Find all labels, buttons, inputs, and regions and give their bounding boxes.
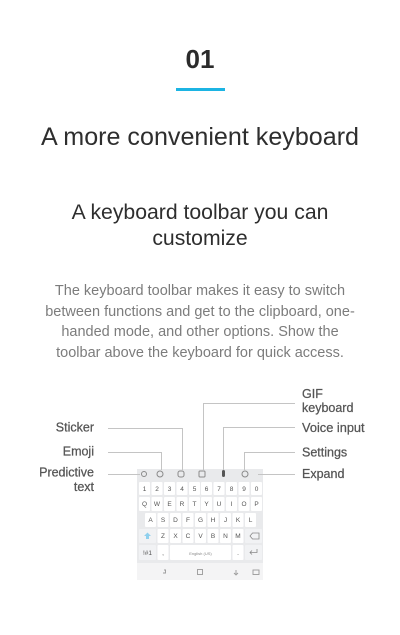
- key labels: H: [211, 517, 216, 524]
- key labels: 7: [217, 486, 221, 493]
- key labels: 8: [230, 486, 234, 493]
- left callout labels: [39, 420, 95, 494]
- key labels: Q: [142, 501, 147, 508]
- enter icon: [250, 549, 257, 554]
- key labels: A: [148, 517, 153, 524]
- left callout labels: Sticker: [56, 420, 94, 434]
- description text: between functions and get to the clipboard, one-: [45, 304, 355, 320]
- key labels: Z: [161, 533, 165, 540]
- backspace icon: [250, 533, 259, 539]
- left callout labels: text: [74, 480, 95, 494]
- key labels: G: [198, 517, 203, 524]
- keyboard: [137, 469, 263, 580]
- subheading: A keyboard toolbar you can: [72, 201, 328, 224]
- callout lines: [108, 404, 295, 474]
- right callout labels: Settings: [302, 446, 347, 460]
- key labels: 5: [193, 486, 197, 493]
- key labels: 3: [168, 486, 172, 493]
- right callout labels: Voice input: [302, 420, 365, 435]
- key labels: 4: [180, 486, 184, 493]
- right callout labels: keyboard: [302, 401, 353, 415]
- key labels: K: [236, 517, 241, 524]
- subheading: customize: [152, 226, 248, 250]
- description text: [45, 283, 355, 360]
- key labels: D: [173, 517, 178, 524]
- key labels: !#1: [143, 550, 152, 557]
- toolbar icons: [142, 471, 248, 477]
- key labels: 1: [143, 486, 147, 493]
- key labels: F: [186, 517, 190, 524]
- key labels: O: [241, 501, 247, 508]
- key labels: Y: [204, 501, 209, 508]
- key labels: T: [193, 501, 197, 508]
- key labels: 0: [255, 486, 259, 493]
- key labels: S: [161, 517, 166, 524]
- key labels: .: [237, 550, 239, 557]
- shift icon: [144, 532, 151, 539]
- subheading: [72, 201, 328, 250]
- key labels: I: [231, 501, 233, 508]
- right callout labels: GIF: [302, 387, 323, 401]
- left callout labels: Predictive: [39, 466, 94, 480]
- key labels: L: [249, 517, 253, 524]
- key labels: 2: [155, 486, 159, 493]
- key labels: E: [167, 501, 172, 508]
- main heading: A more convenient keyboard: [41, 123, 359, 151]
- key labels: P: [254, 501, 259, 508]
- key labels: V: [198, 533, 203, 540]
- key labels: X: [173, 533, 178, 540]
- description text: toolbar above the keyboard for quick access.: [56, 344, 344, 360]
- key labels: English (US): [189, 551, 212, 556]
- key labels: [142, 486, 259, 557]
- section number: 01: [186, 44, 214, 74]
- key labels: ,: [162, 550, 164, 557]
- right callout labels: [302, 387, 365, 481]
- key labels: 9: [242, 486, 246, 493]
- key labels: C: [186, 533, 191, 540]
- number row keys: [139, 482, 262, 560]
- left callout labels: Emoji: [63, 444, 94, 458]
- key labels: N: [223, 533, 228, 540]
- key labels: 6: [205, 486, 209, 493]
- accent bar: [176, 88, 225, 91]
- key labels: M: [235, 533, 241, 540]
- key labels: R: [180, 501, 185, 508]
- key labels: U: [217, 501, 222, 508]
- key labels: B: [211, 533, 215, 540]
- description text: handed mode, and other options. Show the: [61, 324, 339, 340]
- right callout labels: Expand: [302, 467, 344, 481]
- navigation bar icons: [163, 570, 259, 575]
- key labels: J: [224, 517, 227, 524]
- key labels: W: [154, 501, 161, 508]
- description text: The keyboard toolbar makes it easy to switch: [55, 283, 345, 299]
